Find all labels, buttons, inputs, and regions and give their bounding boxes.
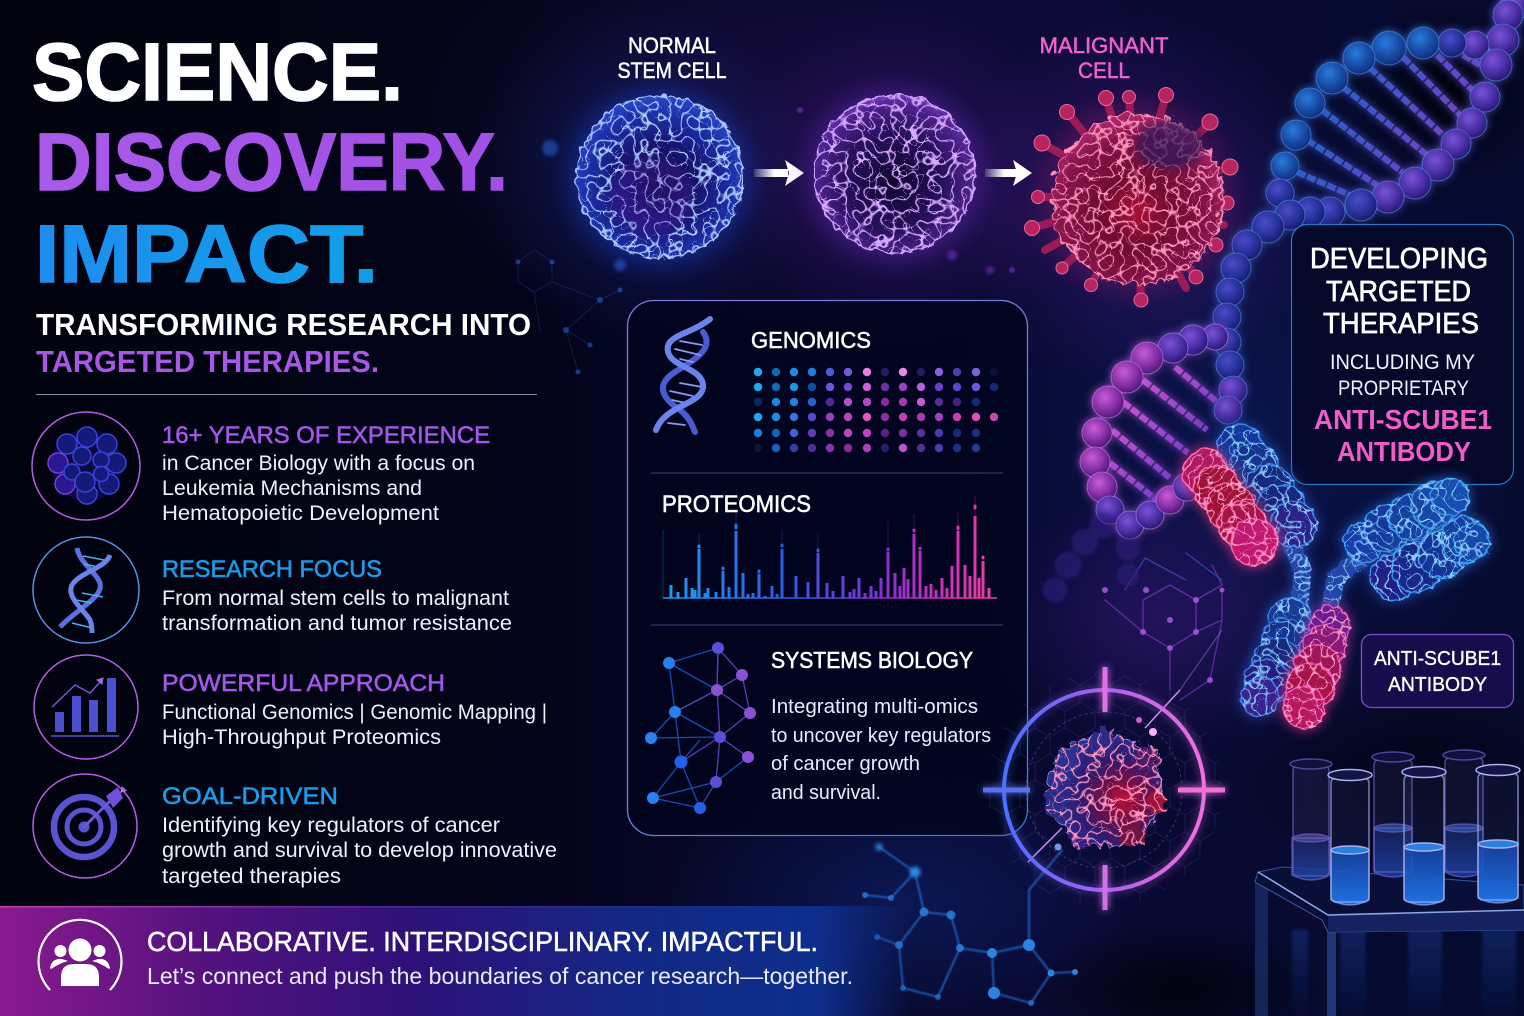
label: malignant cell: MALIGNANT [1040, 33, 1168, 58]
text: systems biology: and survival. [771, 781, 881, 804]
subtitle: TRANSFORMING RESEARCH INTO [36, 307, 531, 342]
malignant cell [1024, 88, 1238, 307]
normal stem cell [570, 90, 750, 266]
rack legs [1255, 880, 1516, 1016]
body: growth and survival to develop innovative [162, 839, 557, 862]
title: IMPACT. [35, 209, 378, 300]
test tubes [1255, 750, 1524, 1016]
body: Leukemia Mechanisms and [162, 477, 422, 500]
fading strand [1043, 512, 1140, 602]
icon: people [38, 920, 121, 990]
body [162, 814, 557, 888]
section: powerful approach [34, 655, 547, 759]
icon: DNA [33, 537, 139, 643]
heading: therapies: TARGETED [1326, 276, 1471, 308]
text: including my proprietary: PROPRIETARY [1338, 377, 1469, 400]
subtitle: TARGETED THERAPIES. [36, 344, 379, 379]
rungs [1297, 55, 1480, 195]
label: malignant cell: CELL [1078, 58, 1130, 83]
text: systems biology: to uncover key regulators [771, 724, 991, 747]
banner text: COLLABORATIVE. INTERDISCIPLINARY. IMPACTFUL. [147, 926, 818, 957]
spikes [1024, 88, 1238, 307]
antibody [1181, 422, 1488, 726]
heading: 16+ YEARS OF EXPERIENCE [162, 422, 490, 449]
right upper lobe [1342, 476, 1467, 560]
antibody label [1362, 634, 1514, 708]
target reticle [983, 630, 1225, 910]
heading: POWERFUL APPROACH [162, 670, 445, 697]
upper-left blue lobe [1215, 422, 1315, 545]
lower pink lobe [1281, 605, 1348, 726]
title: DISCOVERY. [35, 117, 508, 208]
body: From normal stem cells to malignant [162, 587, 509, 610]
front tubes [1328, 764, 1520, 905]
text: including my proprietary: INCLUDING MY [1330, 351, 1475, 374]
text: including my proprietary [1330, 351, 1475, 400]
heading: therapies [1310, 243, 1488, 340]
body: in Cancer Biology with a focus on [162, 452, 475, 475]
strand beads [1213, 0, 1524, 424]
heading: therapies: THERAPIES [1323, 308, 1479, 340]
title [32, 27, 508, 300]
intermediate cell [807, 89, 983, 261]
heading: RESEARCH FOCUS [162, 556, 382, 583]
label: normal stem cell: NORMAL [628, 33, 716, 58]
body: Hematopoietic Development [162, 502, 439, 525]
back tubes [1290, 750, 1485, 880]
text: systems biology: of cancer growth [771, 752, 920, 775]
text: systems biology: Integrating multi-omics [771, 695, 978, 718]
section: goal-driven [33, 774, 557, 888]
body: transformation and tumor resistance [162, 612, 512, 635]
upper-left pink lobe [1181, 448, 1275, 563]
heading: systems biology: SYSTEMS BIOLOGY [771, 647, 973, 673]
body [162, 701, 547, 749]
panel: cell progression [570, 33, 1238, 307]
antibody label: ANTI-SCUBE1 [1374, 648, 1501, 670]
strand beads [1080, 324, 1228, 539]
panel: developing targeted therapies [1292, 224, 1514, 484]
icon: target [33, 774, 137, 878]
highlight: antibody name: ANTIBODY [1337, 436, 1471, 467]
antibody label: ANTIBODY [1388, 674, 1487, 696]
icon: bar chart [34, 655, 138, 759]
title: SCIENCE. [32, 27, 403, 118]
background molecular network [516, 107, 1224, 1006]
targeted cell [1039, 724, 1162, 844]
body: Identifying key regulators of cancer [162, 814, 500, 837]
arrow [754, 160, 804, 186]
rack plate [1255, 867, 1524, 932]
hinge [1286, 535, 1360, 607]
highlight: antibody name [1314, 404, 1492, 467]
heading: proteomics: PROTEOMICS [662, 491, 811, 518]
section: experience [32, 412, 490, 525]
icon: cell cluster [32, 412, 140, 520]
panel: omics [628, 300, 1028, 836]
rungs [1110, 367, 1217, 500]
body: High-Throughput Proteomics [162, 726, 441, 749]
label: malignant cell [1040, 33, 1168, 83]
heading: genomics: GENOMICS [751, 327, 871, 353]
body: Functional Genomics | Genomic Mapping | [162, 701, 547, 724]
body [162, 587, 512, 635]
right lower lobe [1369, 515, 1488, 598]
section: research focus [33, 537, 512, 643]
subtitle [36, 307, 531, 379]
text: systems biology [771, 695, 991, 804]
body: targeted therapies [162, 865, 341, 888]
label: normal stem cell [618, 33, 726, 83]
heading: therapies: DEVELOPING [1310, 243, 1488, 275]
heading: GOAL-DRIVEN [162, 783, 338, 810]
label: normal stem cell: STEM CELL [618, 58, 726, 83]
dot matrix [754, 368, 998, 452]
body [162, 452, 475, 525]
lower DNA helix [1043, 324, 1228, 602]
spectrum chart [663, 496, 997, 598]
network icon [645, 642, 756, 814]
footer banner: Let’s connect and push the boundaries of cancer research—together. [147, 963, 853, 989]
lower blue lobe [1239, 596, 1309, 714]
arrow [985, 160, 1032, 186]
footer banner [0, 906, 910, 1016]
upper DNA helix [1213, 0, 1524, 424]
highlight: antibody name: ANTI-SCUBE1 [1314, 404, 1492, 435]
icon: DNA [656, 319, 710, 432]
